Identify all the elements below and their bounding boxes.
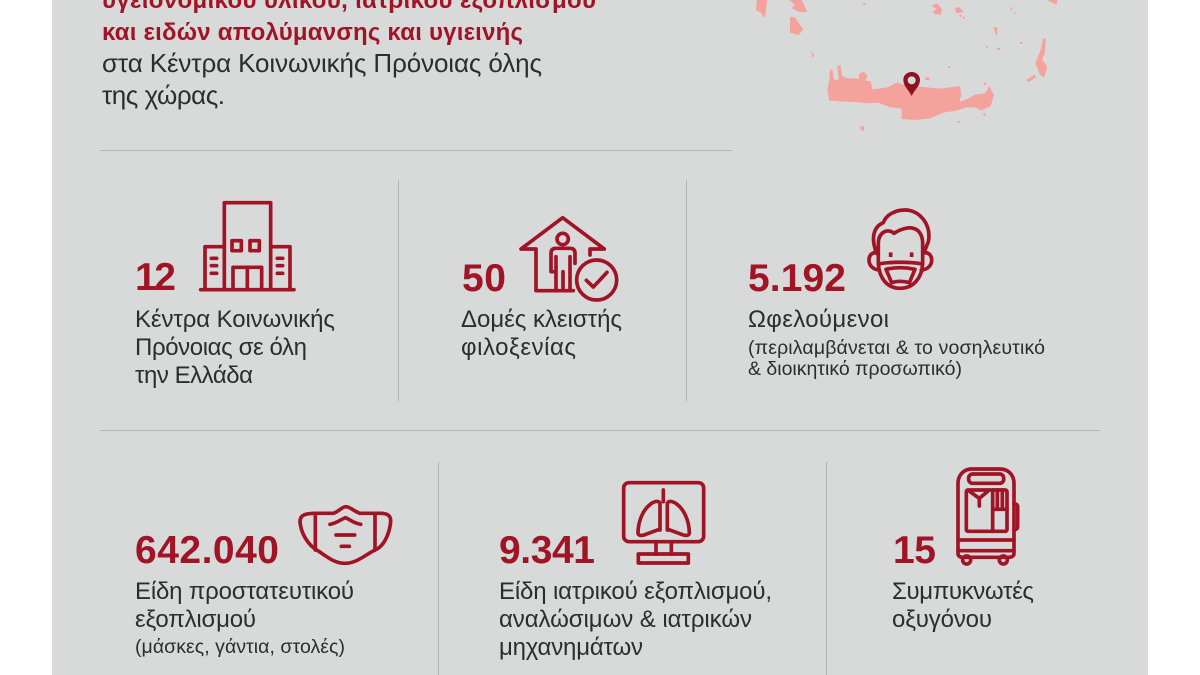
stat: closed care facilities: 50 <box>462 257 506 300</box>
stat: protective equipment: Είδη προστατευτικού <box>135 578 354 605</box>
stat: medical equipment: μηχανημάτων <box>499 634 643 661</box>
stat: welfare centres <box>135 203 335 389</box>
stat: closed care facilities: φιλοξενίας <box>461 334 576 361</box>
map pin <box>903 72 920 96</box>
stat: medical equipment <box>499 483 772 661</box>
stat: oxygen concentrators: Συμπυκνωτές <box>892 578 1034 605</box>
stat: medical equipment: 9.341 <box>499 529 595 572</box>
stat: beneficiaries: & διοικητικό προσωπικό) <box>748 358 962 380</box>
stat: welfare centres: Κέντρα Κοινωνικής <box>135 306 335 333</box>
intro text: της χώρας. <box>102 80 225 110</box>
icon: oxygen concentrator <box>958 469 1018 564</box>
stat: beneficiaries: (περιλαμβάνεται & το νοσηλευτικό <box>748 337 1045 359</box>
stat: closed care facilities <box>461 218 622 361</box>
stat: medical equipment: Είδη ιατρικού εξοπλισμού, <box>499 578 772 605</box>
stat: protective equipment <box>135 507 391 658</box>
intro text: και ειδών απολύμανσης και υγιεινής <box>102 19 523 46</box>
stat: oxygen concentrators: 15 <box>893 529 936 572</box>
stat: oxygen concentrators <box>892 469 1034 633</box>
stat: medical equipment: αναλώσιμων & ιατρικών <box>499 606 752 633</box>
stat: protective equipment: εξοπλισμού <box>135 606 256 633</box>
stat: welfare centres: Πρόνοιας σε όλη <box>135 334 307 361</box>
stat: closed care facilities: Δομές κλειστής <box>461 306 622 333</box>
intro text: στα Κέντρα Κοινωνικής Πρόνοιας όλης <box>102 48 542 78</box>
stat: oxygen concentrators: οξυγόνου <box>892 606 992 633</box>
icon: face with mask <box>869 210 932 288</box>
stat: welfare centres: 12 <box>135 256 176 299</box>
stat: beneficiaries: Ωφελούμενοι <box>748 306 889 333</box>
stat: beneficiaries: 5.192 <box>748 257 846 300</box>
icon: surgical mask <box>300 507 391 563</box>
icon: house with person and check <box>521 218 617 300</box>
icon: monitor with lungs <box>624 483 704 563</box>
stat: protective equipment: (μάσκες, γάντια, στολές) <box>135 636 345 658</box>
intro text <box>102 0 596 110</box>
island: Crete <box>827 65 994 120</box>
stat: welfare centres: την Ελλάδα <box>135 362 253 389</box>
stat: beneficiaries <box>748 210 1045 380</box>
map of southern Greece with Crete <box>756 0 1057 131</box>
stat: protective equipment: 642.040 <box>135 529 279 572</box>
icon: building <box>201 203 294 290</box>
